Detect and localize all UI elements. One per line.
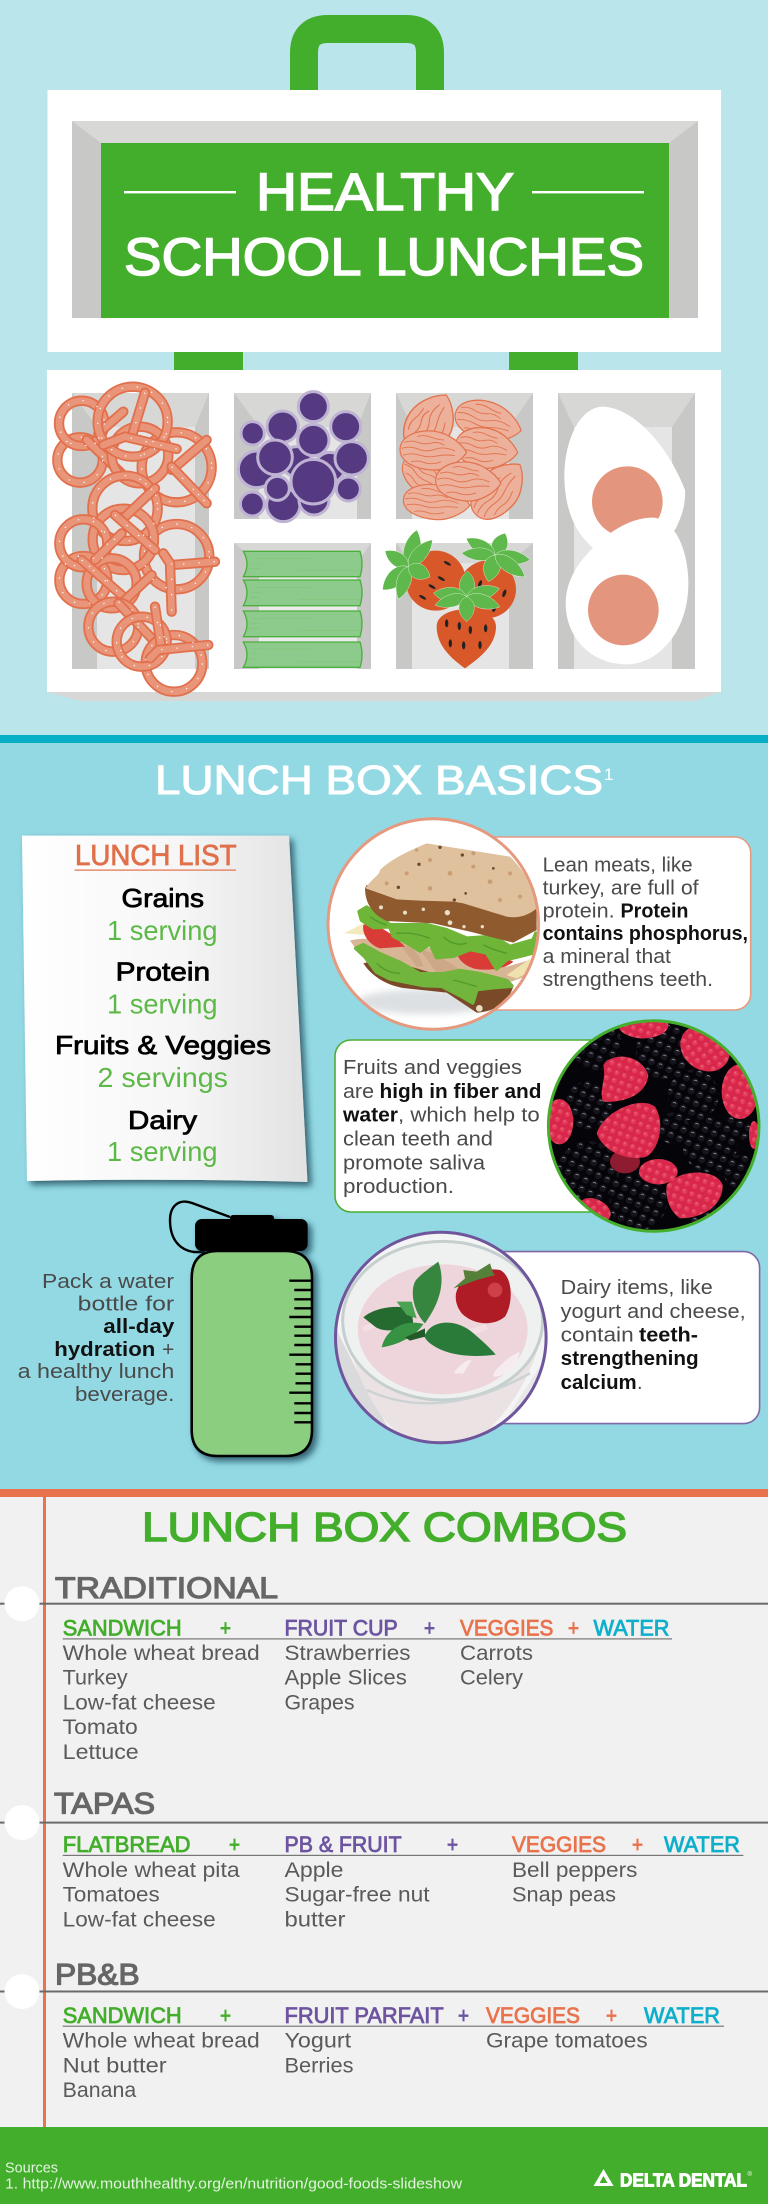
text: protein — [543, 854, 748, 991]
notebook rule and hole — [0, 1805, 768, 1840]
text: fruits and veggies: Fruits and veggies — [343, 1057, 522, 1079]
text: fruits and veggies: clean teeth and — [343, 1128, 493, 1150]
food: blueberries — [238, 392, 368, 522]
sandwich items: Whole wheat bread — [63, 2029, 260, 2052]
fruit cup items — [284, 1642, 410, 1714]
combo headers: + — [424, 1616, 435, 1641]
text: sources: Sources — [5, 2160, 58, 2176]
icon: water bottle — [170, 1202, 312, 1456]
combo: tapas — [0, 1787, 768, 1932]
text: fruits and veggies — [342, 1057, 542, 1198]
footer band — [0, 2127, 768, 2204]
fruit cup items: Grapes — [284, 1692, 354, 1714]
title: healthy school lunches: HEALTHY — [256, 163, 514, 222]
combo headers: VEGGIES — [486, 2003, 580, 2028]
combo headers: FRUIT CUP — [284, 1616, 398, 1641]
text: dairy: strengthening — [561, 1348, 699, 1370]
list item: fruits and veggies: 2 servings — [98, 1062, 228, 1093]
veggie items: Bell peppers — [512, 1859, 637, 1882]
panel: lunch list note — [22, 836, 308, 1182]
section background: lunch box basics — [0, 735, 768, 1489]
combo headers: + — [220, 2003, 231, 2028]
food: celery sticks — [243, 551, 362, 667]
text: fruits and veggies: water — [342, 1104, 398, 1126]
pb and fruit items: Apple — [284, 1859, 344, 1882]
photo: berries — [546, 1019, 760, 1233]
text: water bottle tip: a healthy lunch — [18, 1361, 174, 1383]
fruit cup items: Strawberries — [284, 1642, 410, 1665]
text: protein: strengthens teeth. — [543, 969, 713, 991]
text: dairy: yogurt and cheese, — [561, 1301, 746, 1323]
illustration: lunch box — [47, 29, 721, 701]
pb and fruit items — [284, 1859, 430, 1932]
combo headers: WATER — [644, 2003, 720, 2028]
list item: protein — [107, 956, 218, 1019]
sandwich items: Nut butter — [63, 2054, 167, 2077]
fruit parfait items: Berries — [284, 2054, 354, 2077]
combo headers: + — [606, 2003, 617, 2028]
flatbread items: Tomatoes — [63, 1884, 160, 1906]
bottle measuring marks — [289, 1281, 311, 1422]
heading: lunch box basics: LUNCH BOX BASICS — [155, 757, 603, 803]
combo headers: SANDWICH — [63, 2003, 182, 2028]
flatbread items: Whole wheat pita — [63, 1859, 240, 1882]
text: protein: contains phosphorus, — [543, 923, 748, 945]
text: protein: Protein — [620, 901, 688, 923]
text: sources: 1. http://www.mouthhealthy.org/en/nutrition/good-foods-slideshow — [5, 2176, 462, 2193]
text: dairy: Dairy items, like — [561, 1277, 713, 1299]
lunch box handle — [304, 29, 430, 90]
compartment: eggs — [558, 393, 695, 669]
combo headers: WATER — [664, 1832, 740, 1857]
fruit cup items: Apple Slices — [284, 1666, 407, 1690]
callout: fruits and veggies — [335, 1012, 768, 1235]
list item: dairy: Dairy — [128, 1105, 197, 1135]
compartment: pretzels — [72, 393, 209, 669]
text: dairy: contain — [561, 1324, 634, 1346]
combo headers — [63, 2003, 724, 2028]
text: fruits and veggies: promote saliva — [343, 1153, 486, 1175]
sandwich items: Whole wheat bread — [63, 1642, 260, 1665]
callout: dairy — [335, 1232, 760, 1445]
fruit parfait items — [284, 2029, 354, 2077]
text: protein: Lean meats, like — [543, 854, 693, 876]
flatbread items: Low-fat cheese — [63, 1908, 216, 1932]
text: water bottle tip: + — [162, 1339, 174, 1361]
text: fruits and veggies: high in fiber and — [380, 1081, 542, 1103]
text: dairy: calcium — [561, 1372, 637, 1394]
sandwich items: Banana — [63, 2079, 137, 2102]
heading: pb and b: PB&B — [55, 1959, 140, 1992]
combo headers — [63, 1616, 672, 1641]
heading: lunch list: LUNCH LIST — [75, 840, 236, 872]
heading: lunch box basics: 1 — [604, 765, 613, 784]
callout: protein — [327, 818, 751, 1030]
sandwich items: Turkey — [63, 1666, 128, 1690]
combo headers: FRUIT PARFAIT — [284, 2003, 444, 2028]
veggie items: Carrots — [460, 1642, 533, 1665]
heading: traditional: TRADITIONAL — [55, 1572, 278, 1605]
lunch box lid — [48, 90, 721, 352]
fruit parfait items: Yogurt — [284, 2029, 351, 2052]
combo headers: + — [568, 1616, 579, 1641]
list item: protein: 1 serving — [107, 988, 218, 1019]
sandwich items: Lettuce — [63, 1741, 139, 1764]
food: strawberries — [377, 528, 531, 668]
text: dairy: . — [637, 1372, 643, 1394]
title: healthy school lunches: SCHOOL LUNCHES — [124, 228, 644, 287]
combo headers: + — [458, 2003, 469, 2028]
list item: dairy: 1 serving — [107, 1136, 218, 1167]
combo headers — [63, 1832, 743, 1857]
list item: grains — [107, 883, 218, 946]
text: water bottle tip: bottle for — [78, 1294, 175, 1316]
combo headers: PB & FRUIT — [284, 1832, 402, 1857]
combo headers: + — [229, 1832, 240, 1857]
text: water bottle tip — [18, 1271, 175, 1406]
list item: fruits and veggies: Fruits & Veggies — [55, 1030, 271, 1060]
section background: lunch box combos — [0, 1489, 768, 2127]
compartment: almonds — [396, 393, 533, 519]
combo headers: SANDWICH — [63, 1616, 182, 1641]
text: water bottle tip: beverage. — [75, 1384, 174, 1406]
pb and fruit items: Sugar-free nut — [284, 1884, 430, 1906]
text: fruits and veggies: production. — [343, 1176, 454, 1198]
notebook rule and hole — [0, 1974, 768, 2009]
text: water bottle tip: all-day — [103, 1316, 175, 1338]
food: boiled eggs — [564, 407, 688, 664]
sandwich items — [63, 2029, 260, 2102]
text: water bottle tip: hydration — [54, 1339, 155, 1361]
heading: tapas: TAPAS — [54, 1787, 155, 1820]
compartment: strawberries — [396, 543, 533, 669]
text: sources — [5, 2160, 462, 2193]
text: dairy: teeth- — [639, 1324, 698, 1346]
combo: traditional — [0, 1572, 768, 1764]
veggie items — [460, 1642, 533, 1690]
heading: lunch box combos: LUNCH BOX COMBOS — [142, 1504, 627, 1550]
text: fruits and veggies: are — [343, 1081, 374, 1103]
photo: yogurt — [335, 1232, 547, 1445]
list item: grains: Grains — [122, 883, 204, 913]
food: pretzels — [57, 387, 215, 692]
top background — [0, 0, 768, 735]
text: fruits and veggies: , which help to — [398, 1104, 540, 1126]
text: protein: protein. — [543, 901, 615, 923]
veggie items: Celery — [460, 1666, 524, 1690]
photo: sandwich — [327, 818, 539, 1030]
sandwich items: Tomato — [63, 1716, 138, 1739]
notebook rule and hole — [0, 1586, 768, 1621]
list item: grains: 1 serving — [107, 915, 218, 946]
lunch box tray — [47, 370, 721, 701]
text: dairy — [561, 1277, 746, 1394]
sandwich items: Low-fat cheese — [63, 1692, 216, 1714]
title: healthy school lunches — [124, 163, 644, 287]
food: almonds — [394, 384, 536, 529]
combo headers: + — [220, 1616, 231, 1641]
combo: pb and b — [0, 1959, 768, 2102]
list item: dairy — [107, 1105, 218, 1167]
text: water bottle tip: Pack a water — [42, 1271, 174, 1293]
veggie items — [512, 1859, 637, 1906]
compartment: celery — [234, 543, 371, 669]
lunch box hinges — [174, 350, 578, 372]
veggie items: Snap peas — [512, 1884, 616, 1906]
logo: delta dental: DELTA DENTAL — [620, 2170, 747, 2190]
combo headers: VEGGIES — [512, 1832, 606, 1857]
logo: delta dental: ® — [748, 2171, 752, 2178]
text: protein: a mineral that — [543, 946, 671, 968]
combo headers: FLATBREAD — [63, 1832, 191, 1857]
combo headers: + — [632, 1832, 643, 1857]
text: protein: turkey, are full of — [543, 878, 699, 900]
combo headers: WATER — [594, 1616, 670, 1641]
combo headers: VEGGIES — [460, 1616, 553, 1641]
compartment: blueberries — [234, 393, 371, 519]
flatbread items — [63, 1859, 240, 1932]
list item: fruits and veggies — [55, 1030, 271, 1093]
veggie item: Grape tomatoes — [486, 2029, 648, 2052]
combo headers: + — [447, 1832, 458, 1857]
pb and fruit items: butter — [284, 1908, 346, 1932]
list item: protein: Protein — [116, 956, 210, 986]
sandwich items — [63, 1642, 260, 1764]
